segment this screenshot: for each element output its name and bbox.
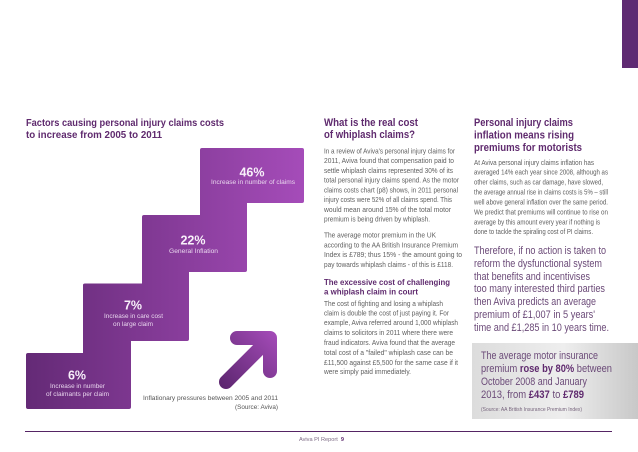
text block: claims inflation: At Aviva personal injury claims inflation has (474, 160, 595, 167)
step: 6%: of claimants per claim (46, 391, 109, 398)
text block: average premium: Index is £789; thus 15% - the amount going to (324, 250, 462, 259)
panel background (472, 343, 638, 419)
text block: claims inflation: well above general inflation over the same period. (473, 200, 608, 207)
step: 6%: 6% (68, 368, 86, 382)
text block: whiplash review: injury costs were 52% of all claims spend. This (324, 195, 452, 204)
text block: court cost: fraud indicators. Aviva found that the average (324, 338, 455, 347)
text block: court cost: example, Aviva referred around 1,000 whiplash (324, 318, 458, 327)
subheading: court cost: a whiplash claim in court (324, 286, 418, 296)
step: 6%: Increase in number (50, 383, 106, 390)
heading: whiplash: of whiplash claims? (324, 129, 415, 141)
subheading: court cost: The excessive cost of challenging (324, 277, 450, 287)
footer text: Aviva PI Report 9 (299, 437, 344, 443)
text block: claims inflation: done to tackle the spiraling cost of PI claims. (474, 229, 593, 236)
text block: whiplash review: 2011, Aviva found that compensation paid to (324, 156, 454, 165)
callout: prediction: that benefits and incentivises (474, 271, 590, 283)
staircase shape (26, 148, 304, 409)
step: 22% (169, 234, 218, 255)
text block: average premium: The average motor premium in the UK (324, 230, 436, 240)
title: factors: to increase from 2005 to 2011 (26, 130, 162, 141)
text block: court cost: claims to solicitors in 2011 where there were (324, 328, 453, 337)
step: 7%: 7% (124, 298, 142, 312)
title: factors: Factors causing personal injury claims costs (26, 118, 224, 129)
step: 7%: Increase in care cost (104, 313, 163, 320)
text block: court cost: claim is double the cost of just paying it. For (324, 309, 450, 318)
footer rule (25, 431, 612, 432)
chart caption: Inflationary pressures between 2005 and 2011 (143, 395, 278, 402)
chart caption (143, 395, 278, 411)
callout: prediction: Therefore, if no action is taken to (474, 245, 606, 257)
text block: average premium: according to the AA British Insurance Premium (324, 240, 458, 249)
step: 22%: 22% (180, 234, 206, 248)
text block: average premium: pay towards whiplash claims - of this is £118. (324, 260, 453, 269)
corner tab (622, 0, 638, 68)
heading: premiums: inflation means rising (474, 130, 574, 142)
text block: whiplash review: premium is being driven by whiplash. (324, 214, 430, 224)
text block: court cost: The cost of fighting and losing a whiplash (324, 299, 443, 308)
text block: court cost: were simply paid immediately. (323, 367, 411, 376)
callout: prediction: too many interested third parties (474, 283, 605, 295)
panel text: 2013, from £437 to £789 (481, 389, 584, 401)
callout: prediction: reform the dysfunctional system (474, 258, 602, 270)
text block: court cost: total cost of a "failed" whiplash case can be (324, 348, 453, 357)
callout: prediction: time and £1,285 in 10 years time. (474, 322, 609, 334)
text block: whiplash review: would mean around 15% of the total motor (323, 205, 452, 214)
text block: average premium (324, 230, 462, 269)
text block: claims inflation: averaged 14% each year since 2008, although as (474, 170, 608, 177)
text block: claims inflation: other claims, such as car damage, have slowed, (474, 180, 603, 187)
chart caption: (Source: Aviva) (235, 404, 278, 411)
heading: whiplash: What is the real cost (324, 117, 418, 129)
icon: rising arrow (226, 338, 270, 382)
text block: whiplash review: claims costs chart (p8) shows, in 2011 personal (324, 185, 458, 194)
callout: prediction: then Aviva predicts an average (474, 296, 596, 308)
text block: court cost (323, 299, 458, 376)
step: 46%: 46% (239, 166, 265, 180)
panel text: premium rose by 80% between (481, 363, 612, 375)
text block: whiplash review: In a review of Aviva's personal injury claims for (324, 146, 456, 155)
panel text (481, 350, 612, 401)
text block: claims inflation: the average annual rise in claims costs is 5% – still (474, 190, 608, 197)
staircase chart (26, 148, 304, 409)
step: 46%: Increase in number of claims (211, 179, 296, 186)
title: factors (26, 118, 224, 141)
text block: whiplash review: total personal injury claims spend. As the motor (324, 176, 460, 184)
panel: premium rise (472, 343, 638, 419)
callout: prediction: premium of £1,007 in 5 years' (474, 309, 595, 321)
text block: whiplash review: settle whiplash claims represented 30% of its (324, 166, 453, 175)
text block: claims inflation: average by this amount every year if nothing is (474, 220, 600, 227)
step: 6% (46, 368, 109, 398)
panel source: (Source: AA British Insurance Premium Index) (481, 407, 582, 413)
text block: whiplash review (323, 146, 460, 224)
step: 7%: on large claim (113, 321, 153, 328)
step: 46% (211, 166, 296, 186)
step: 7% (104, 298, 163, 328)
text block: court cost: £11,500 against £5,500 for the same case if it (324, 358, 458, 367)
heading: premiums: Personal injury claims (474, 117, 573, 129)
panel text: The average motor insurance (481, 350, 598, 362)
heading: premiums (474, 117, 582, 154)
heading: premiums: premiums for motorists (474, 142, 582, 154)
text block: claims inflation (473, 160, 608, 236)
callout: prediction (474, 245, 609, 334)
step: 22%: General Inflation (169, 248, 218, 255)
heading: whiplash (324, 117, 418, 141)
panel text: October 2008 and January (481, 376, 588, 388)
text block: claims inflation: We predict that premiums will continue to rise on (474, 210, 608, 217)
subheading: court cost (324, 277, 450, 296)
